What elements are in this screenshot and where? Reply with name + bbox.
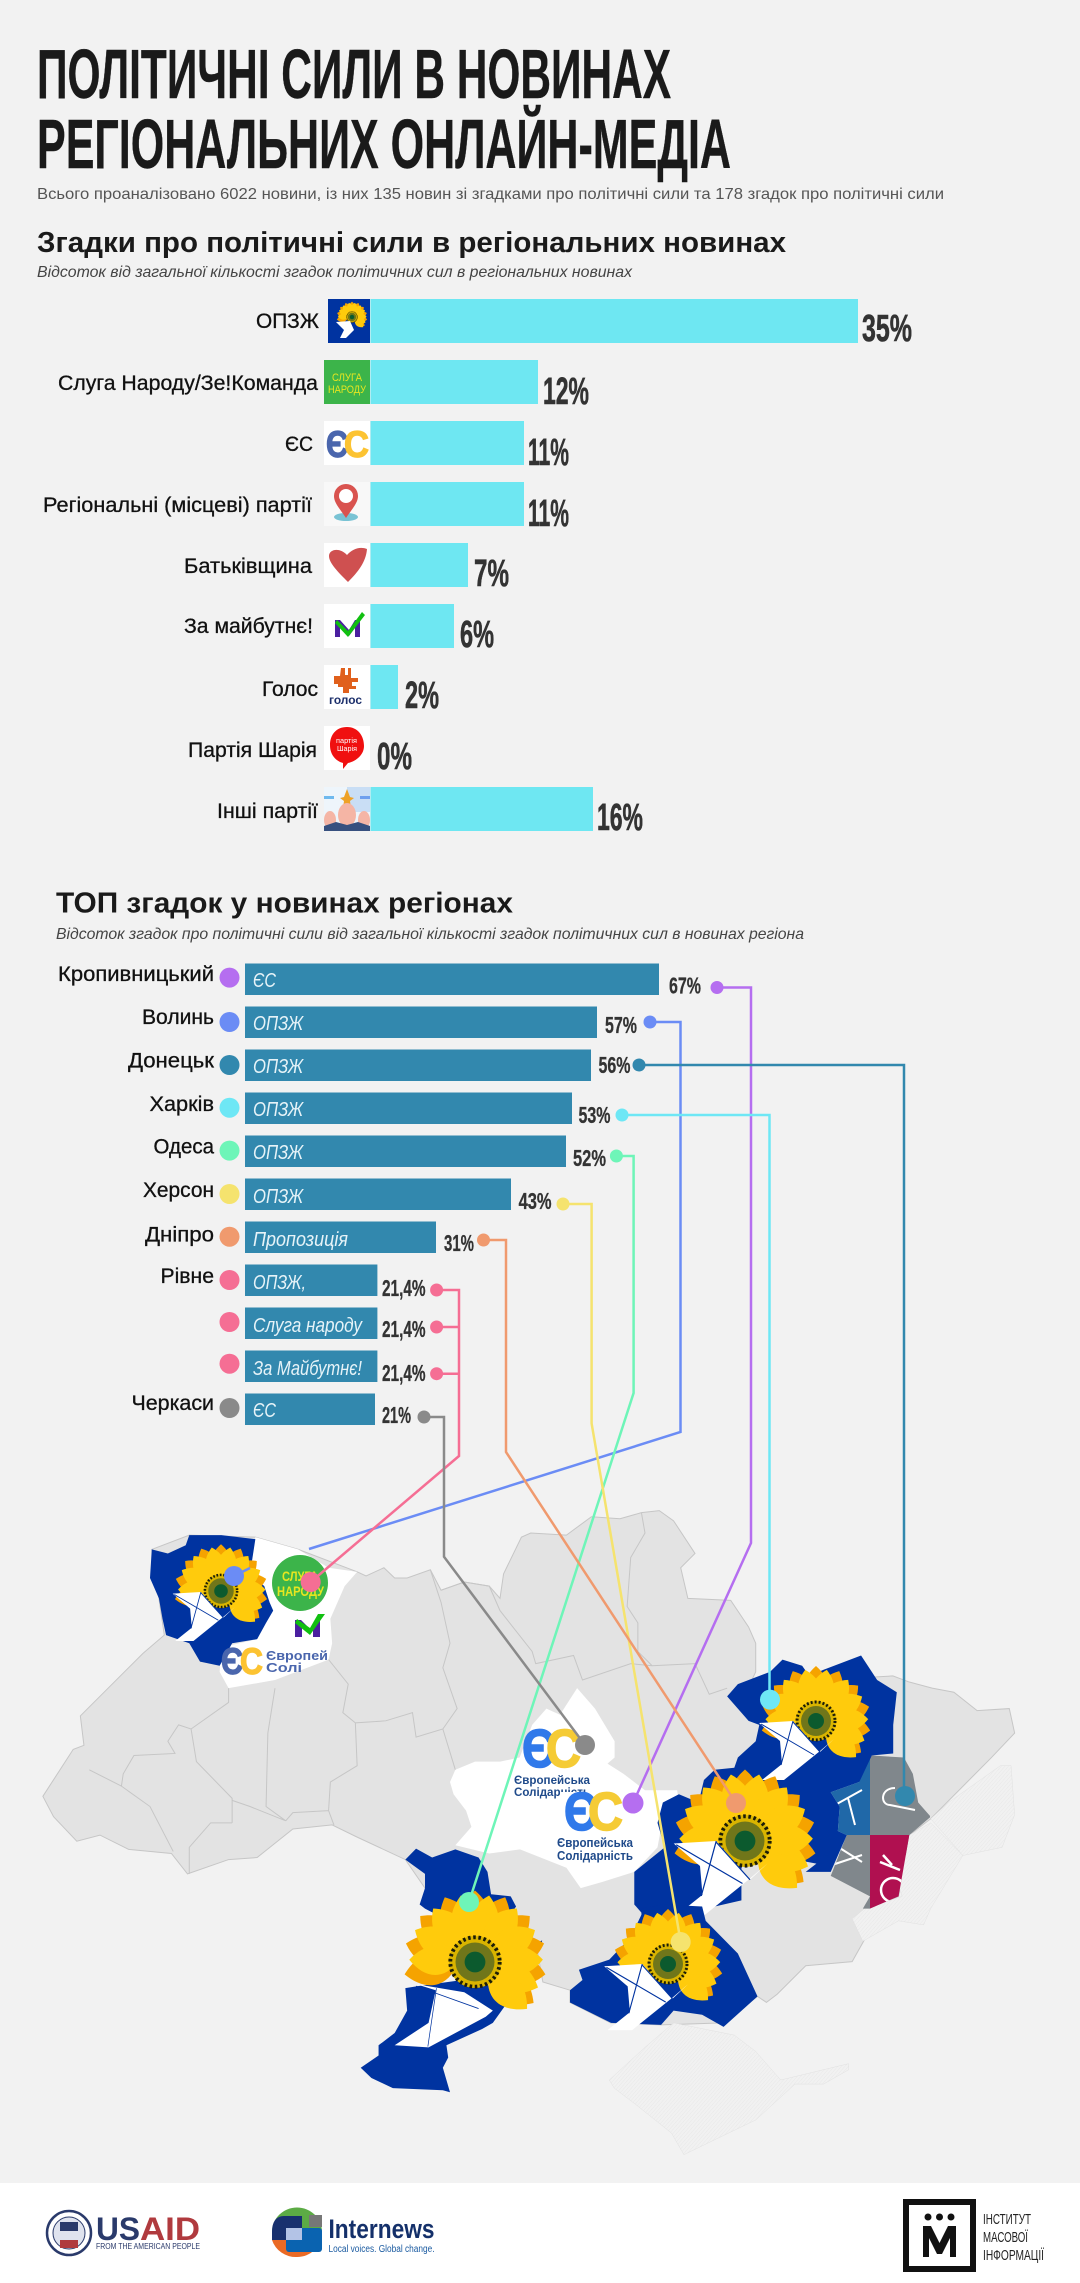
row: Голос [262,665,439,717]
row: ЄС: ЄС [285,433,313,456]
row: Рівне За Майбутнє [220,1350,426,1386]
row: Батьківщина [184,543,509,595]
region: Kharkiv and Dnipro [634,1656,897,1915]
row: Рівне ОПЗЖ [160,1264,426,1301]
row: Черкаси: Черкаси [132,1392,214,1415]
row: Слуга Народу: СЛУГА [332,372,363,384]
row: Партія Шарія: Шарія [337,745,357,753]
bar chart: mentions of political forces [43,299,912,839]
row: Рівне ОПЗЖ: Рівне [160,1265,214,1288]
logo: European Solidarity Rivne: Є [221,1641,243,1682]
row: Одеса [154,1136,606,1171]
logo: Sluha Narodu [272,1555,328,1611]
row: ОПЗЖ [256,299,912,350]
row: Волинь: ОПЗЖ [253,1013,304,1035]
row: Рівне ОПЗЖ: 21,4% [382,1275,426,1301]
bar chart: top mentions by region [58,963,701,1428]
row: Дніпро [145,1222,474,1256]
row: За майбутнє!: 6% [460,614,494,656]
footer band [0,2183,1080,2283]
connector: Волинь [224,1016,680,1586]
subheading: mentions chart: Відсоток від загальної кількості згадок політичних сил в регіональних новинах [37,264,633,281]
connector: Кропивницький [622,981,751,1814]
row: Кропивницький: 67% [669,973,701,999]
row: Харків: Харків [150,1093,214,1116]
row: Одеса: Одеса [154,1136,214,1159]
row: Слуга Народу: Слуга Народу/Зе!Команда [58,372,318,395]
logo: European Solidarity Cherkasy [514,1719,590,1799]
logo: European Solidarity Cherkasy: Є [522,1719,555,1779]
region: Cherkasy and Kirovohrad white [450,1688,679,1888]
logo: USAID: FROM THE AMERICAN PEOPLE [96,2242,200,2251]
connector: Донецьк [632,1058,915,1806]
row: Слуга Народу [58,360,589,413]
region: Volyn and Rivne [150,1535,357,1688]
region: Donetsk quadrants [830,1756,930,1909]
row: Кропивницький [58,963,701,999]
logo: European Solidarity Kirovohrad: Європейська [557,1836,634,1850]
row: Рівне ОПЗЖ: ОПЗЖ, [253,1272,306,1294]
logo: European Solidarity Rivne: Європей [266,1648,328,1663]
row: Батьківщина: Батьківщина [184,555,312,578]
occupied territories hatched [609,1766,1015,2155]
logo: Institute of Mass Information: ІНФОРМАЦІЇ [983,2247,1045,2264]
row: Дніпро: Дніпро [145,1224,214,1247]
connector: Харків [616,1108,780,1710]
row: Інші партії: Інші партії [217,800,318,823]
row: ОПЗЖ: 35% [862,308,912,350]
row: Партія Шарія: Партія Шарія [188,739,317,762]
row: Херсон: ОПЗЖ [253,1186,304,1208]
row: За майбутнє! [184,604,494,656]
row: Дніпро: Пропозиція [253,1229,348,1251]
row: Інші партії [217,787,643,839]
logo: European Solidarity Cherkasy: Солідарність [514,1785,590,1799]
row: Рівне Слуга народу: 21,4% [382,1316,426,1342]
logo: Internews: Internews [328,2214,434,2244]
row: Черкаси: 21% [382,1402,411,1428]
row: Голос: Голос [262,678,318,701]
connector: Дніпро [477,1234,746,1813]
row: Кропивницький: Кропивницький [58,963,214,986]
logo: Institute of Mass Information: МАСОВОЇ [983,2229,1029,2246]
row: Партія Шарія: 0% [377,736,412,778]
connector lines from bars to map [224,981,915,1952]
row: Черкаси [132,1392,411,1428]
logo: Institute of Mass Information: ІНСТИТУТ [983,2211,1031,2228]
row: ЄС [285,421,569,474]
logo: USAID: US [96,2211,140,2247]
row: Рівне За Майбутнє: За Майбутнє! [253,1358,362,1380]
logo: European Solidarity Rivne: С [240,1641,263,1682]
row: Партія Шарія [188,726,412,778]
logo: European Solidarity Cherkasy: С [546,1719,581,1779]
heading: mentions chart: Згадки про політичні сили в регіональних новинах [37,227,786,259]
connector: Рівне [301,1284,459,1592]
map of Ukraine [43,1511,1015,2155]
row: Харків [150,1092,610,1128]
title: ПОЛІТИЧНІ СИЛИ В НОВИНАХ [37,35,671,113]
logo: Sluha Narodu: НАРОДУ [277,1583,324,1599]
row: Донецьк: Донецьк [128,1050,215,1072]
logo: European Solidarity Kirovohrad: Є [564,1782,597,1842]
connector: Херсон [556,1198,691,1952]
logo: Internews: Local voices. Global change. [328,2244,434,2255]
row: Одеса: 52% [573,1145,606,1171]
row: ЄС: 11% [528,432,569,474]
row: Харків: ОПЗЖ [253,1099,304,1121]
row: Дніпро: 31% [444,1230,474,1256]
title [37,35,731,183]
logo: Za Maibutnie [295,1614,325,1637]
logo: European Solidarity Rivne [221,1641,328,1682]
row: Донецьк: ОПЗЖ [253,1056,304,1078]
row: Донецьк: 56% [598,1052,630,1078]
row: Регіональні партії [43,482,569,535]
row: Слуга Народу: 12% [543,371,589,413]
row: Волинь: Волинь [142,1006,214,1029]
row: Батьківщина: 7% [474,553,509,595]
row: Херсон: Херсон [143,1179,214,1202]
row: Херсон: 43% [519,1188,552,1214]
connector: Черкаси [418,1410,595,1755]
logo: European Solidarity Cherkasy: Європейська [514,1773,590,1787]
logo: Sluha Narodu: СЛУГА [282,1568,318,1584]
row: ЄС: Є [326,424,348,465]
logo: USAID [47,2211,200,2255]
row: Рівне Слуга народу [220,1308,426,1342]
heading: top mentions: ТОП згадок у новинах регіонах [56,888,513,920]
logo: European Solidarity Rivne: Солі [266,1660,302,1675]
logo: USAID: AID [140,2211,200,2247]
logo: Institute of Mass Information [906,2202,1045,2269]
row: Партія Шарія: партія [336,737,357,745]
row: Волинь: 57% [605,1012,637,1038]
row: Донецьк [128,1050,630,1081]
row: ОПЗЖ: ОПЗЖ [256,310,320,333]
row: Регіональні партії: 11% [528,493,569,535]
logo: European Solidarity Kirovohrad: Солідарність [557,1849,633,1863]
subtitle: Всього проаналізовано 6022 новини, із них 135 новин зі згадками про політичні сили та 178 згадок про політичні сили [37,186,944,203]
logo: European Solidarity Kirovohrad [557,1782,634,1863]
row: Голос: голос [329,693,362,707]
row: За майбутнє!: За майбутнє! [184,615,313,638]
row: Волинь [142,1006,637,1038]
region: Kherson [570,1904,757,2030]
row: Регіональні партії: Регіональні (місцеві) партії [43,494,312,517]
row: Черкаси: ЄС [253,1400,276,1422]
row: Херсон [143,1178,552,1214]
logo: Internews [272,2208,434,2257]
row: Одеса: ОПЗЖ [253,1142,304,1164]
base regions [43,1511,1015,2025]
row: Голос: 2% [405,675,439,717]
row: Харків: 53% [578,1102,610,1128]
row: ЄС: С [344,424,369,465]
connector: Одеса [459,1150,634,1912]
logo: European Solidarity Kirovohrad: С [588,1782,623,1842]
row: Рівне За Майбутнє: 21,4% [382,1360,426,1386]
row: Інші партії: 16% [597,797,643,839]
row: Кропивницький: ЄС [253,970,276,992]
subheading: top mentions: Відсоток згадок про політичні сили від загальної кількості згадок політичних сил в новинах регіона [56,926,804,943]
region: Odesa [361,1849,548,2092]
row: Рівне Слуга народу: Слуга народу [253,1315,363,1337]
row: Слуга Народу: НАРОДУ [328,384,367,396]
